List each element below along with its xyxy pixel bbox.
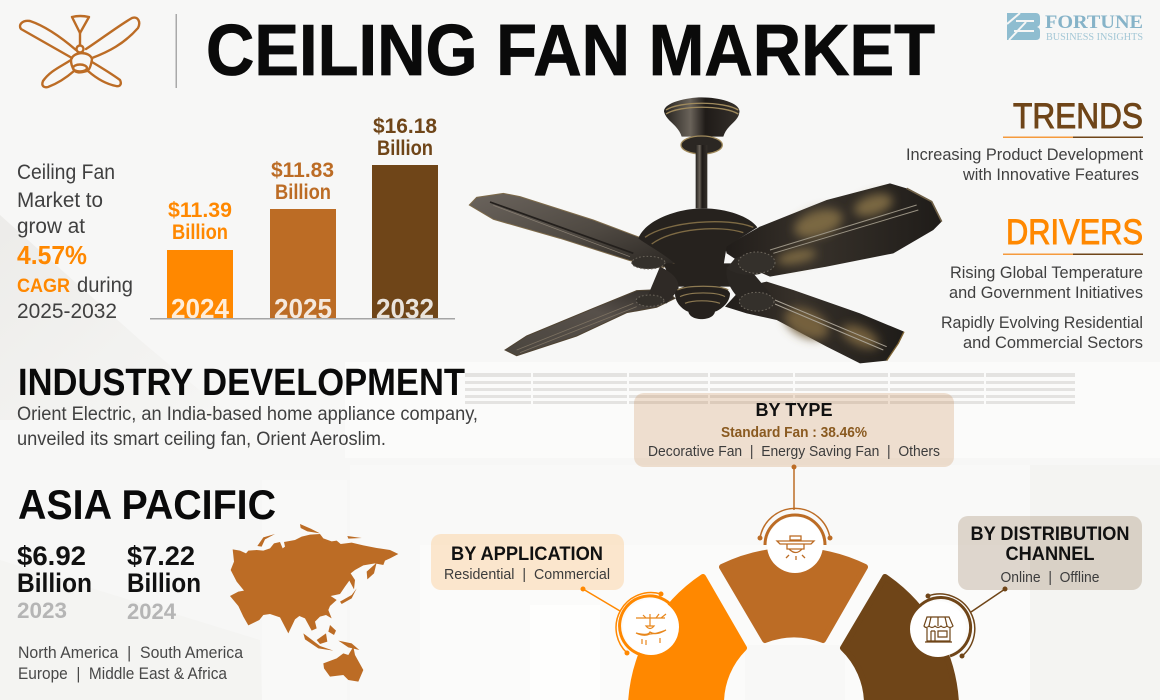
callout: by distribution channel: BY DISTRIBUTION [970,524,1130,545]
callout: by application [431,534,624,590]
callout: by type: Standard Fan : 38.46% [721,425,867,441]
callout: by distribution channel: Online | Offline [1000,569,1100,586]
panel: drivers: Rising Global Temperature [950,263,1143,282]
CAGR text block: during [77,274,133,297]
bar chart [150,115,455,324]
illustration: antique bronze ceiling fan [469,97,942,363]
panel: drivers: DRIVERS [1006,213,1143,252]
bar 2032: Billion [377,137,433,160]
text block: industry development [17,404,478,450]
panel: trends [906,97,1143,184]
icon: distribution badge [910,594,975,658]
heading: asia pacific: ASIA PACIFIC [18,481,276,528]
title divider [176,14,177,88]
connector: by type [792,464,796,510]
panel: drivers: and Government Initiatives [949,283,1143,302]
CAGR text block: 2025-2032 [17,300,117,323]
logo: Fortune Business Insights: FORTUNE [1045,12,1143,33]
CAGR text block: 4.57% [17,240,87,270]
icon: ceiling fan outline [20,16,139,87]
callout: by distribution channel: CHANNEL [1006,544,1095,565]
bar 2024: $11.39 [168,199,232,222]
panel: trends: with Innovative Features [962,165,1139,184]
callout: by type: Decorative Fan | Energy Saving Fan | Others [648,443,940,460]
text block: other regions: Europe | Middle East & Africa [18,665,228,683]
CAGR text block: grow at [17,215,85,238]
heading: industry development: INDUSTRY DEVELOPMENT [18,362,465,404]
CAGR text block: Ceiling Fan [17,161,115,184]
bar 2025 [270,159,336,324]
stat: 2024 value: 2024 [127,599,177,624]
panel: drivers: and Commercial Sectors [963,333,1143,352]
CAGR text block: Market to [17,189,103,212]
connector: by application [580,586,620,611]
stat: 2023 value: $6.92 [17,541,86,571]
stat: 2023 value: Billion [17,568,92,598]
text block: other regions: North America | South America [18,644,244,662]
bar 2025: Billion [275,181,331,204]
callout: by type [634,393,954,467]
logo: Fortune Business Insights: BUSINESS INSIGHTS [1046,32,1143,43]
CAGR text block: CAGR [17,276,70,297]
stat: 2023 value [17,541,92,623]
bar 2032 [372,115,438,324]
stat: 2024 value: Billion [127,568,201,598]
bar 2024: 2024 [171,293,229,324]
callout: by distribution channel [958,516,1142,590]
bar 2032: $16.18 [373,115,437,138]
callout: by application: BY APPLICATION [451,544,603,565]
CAGR text block [17,161,133,323]
segment: application [631,577,744,700]
panel: trends: Increasing Product Development [906,145,1143,164]
icon: application badge [616,592,679,656]
panel: drivers [941,213,1143,352]
bar 2024 [167,199,233,324]
text block: other regions [18,644,244,683]
bar 2025: $11.83 [271,159,334,182]
connector: by distribution [971,586,1008,612]
icon: type badge [758,508,832,573]
callout: by application: Residential | Commercial [444,566,610,583]
panel: drivers: Rapidly Evolving Residential [941,313,1143,332]
text block: industry development: unveiled its smart ceiling fan, Orient Aeroslim. [17,429,386,450]
stat: 2023 value: 2023 [17,598,67,623]
map: asia pacific [230,524,398,682]
bar 2032: 2032 [376,293,434,324]
bar 2025: 2025 [274,293,332,324]
text block: industry development: Orient Electric, an India-based home appliance company, [17,404,478,425]
segment: distribution [843,577,956,700]
title: CEILING FAN MARKET [206,11,935,91]
chart: segmented semicircle [631,550,956,700]
panel: trends: TRENDS [1013,97,1143,136]
stat: 2024 value: $7.22 [127,541,195,571]
bar 2024: Billion [172,221,228,244]
callout: by type: BY TYPE [756,400,832,420]
segment: type [722,550,865,640]
logo: Fortune Business Insights [1007,12,1143,43]
stat: 2024 value [127,541,201,624]
